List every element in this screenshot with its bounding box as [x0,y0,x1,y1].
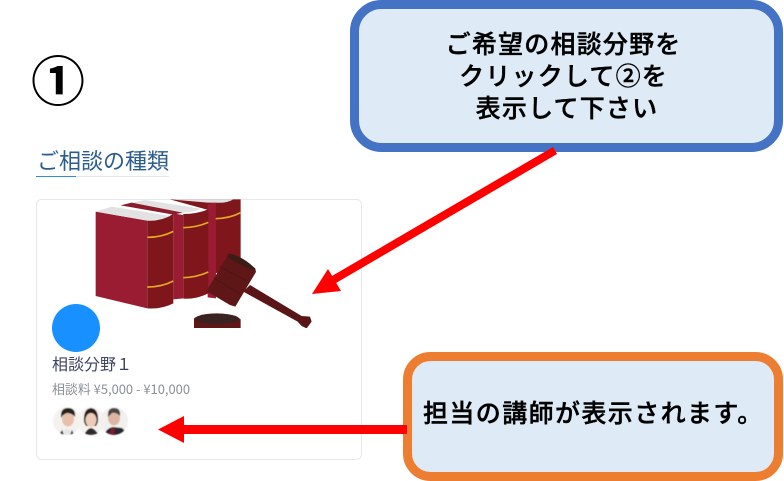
instructor avatars [53,407,128,436]
consultation fee: 相談料 ¥5,000 - ¥10,000 [52,379,190,398]
callout: instructors shown: 担当の講師が表示されます。 [423,394,764,430]
panel: consultation card [36,199,362,460]
callout: select consultation field: クリックして②を [459,57,668,93]
arrow: callout to card [312,147,557,294]
callout: select consultation field: ご希望の相談分野を [446,25,681,61]
image: law books and gavel [96,199,312,328]
gavel head [207,253,256,307]
back book [170,199,241,273]
gavel handle [243,285,312,328]
avatar circle [52,304,100,352]
callout: instructors shown [408,356,778,476]
instructor 1 [53,407,78,435]
instructor 3 [100,407,128,436]
callout: select consultation field [354,4,778,148]
callout: select consultation field: 表示して下さい [476,89,658,125]
middle book [173,214,184,300]
arrow: callout to instructors [158,416,407,443]
step number: ① [31,38,85,117]
front book [96,212,147,308]
card title: 相談分野１ [52,351,132,375]
instructor 2 [80,407,102,436]
gavel base [194,313,241,328]
section heading: ご相談の種類 [37,144,169,176]
